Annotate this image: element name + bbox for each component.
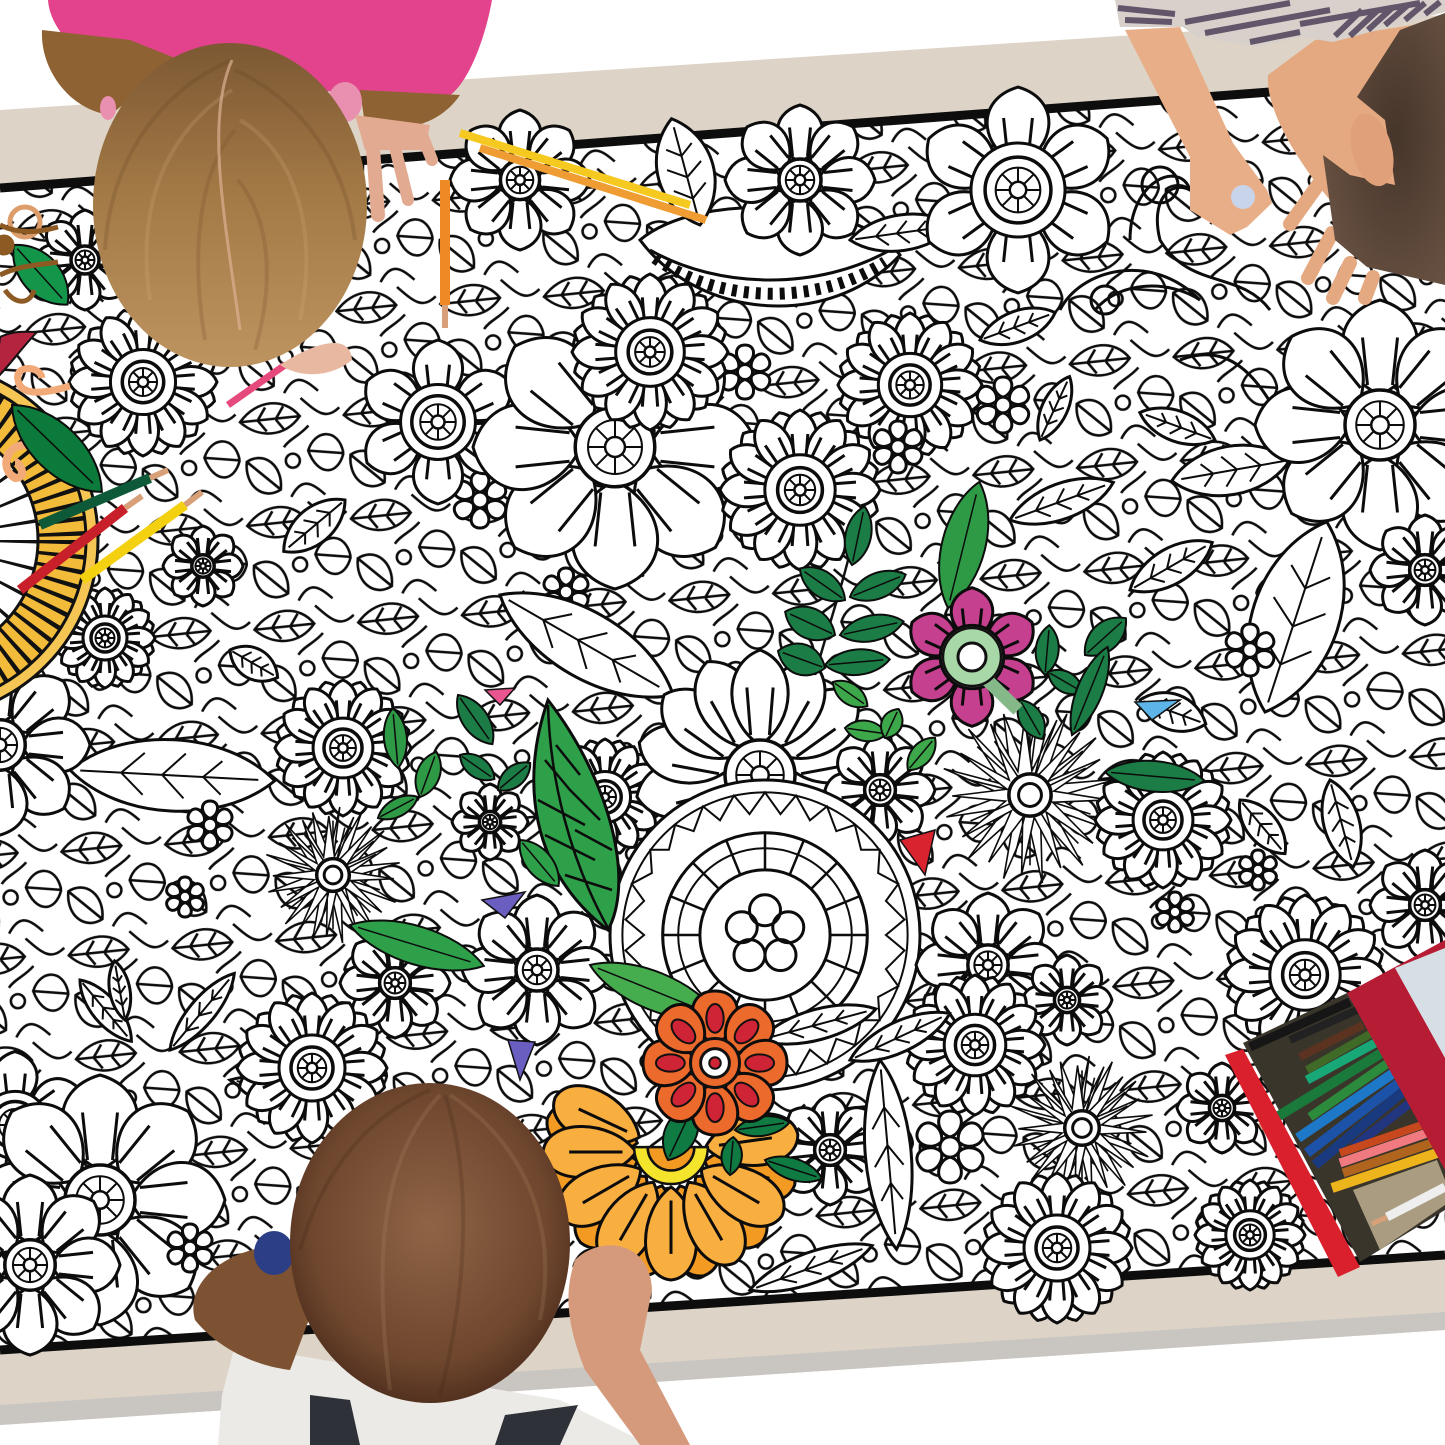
small flower (1155, 892, 1195, 932)
big green striped leaf (534, 700, 619, 930)
dark red petal (0, 332, 37, 380)
right hand fingers (355, 115, 432, 215)
flower (904, 974, 1046, 1116)
hand lower (280, 343, 352, 374)
flower (825, 735, 935, 845)
light green leaves (827, 674, 943, 777)
leaf (844, 1000, 956, 1074)
right ponytail (360, 90, 460, 129)
flower (67, 306, 219, 458)
flower (1177, 1063, 1267, 1153)
flower (340, 928, 450, 1038)
face (1268, 20, 1445, 200)
flower left edge (0, 655, 90, 835)
small flower (974, 377, 1032, 433)
leaf (756, 994, 880, 1055)
flower (450, 110, 590, 250)
leaf (1121, 527, 1221, 605)
poster top rail (0, 80, 1445, 188)
small flower (541, 568, 591, 616)
arm and hand (1125, 27, 1272, 235)
big half daisy (632, 650, 888, 824)
red flower (643, 991, 787, 1135)
flower (980, 1171, 1134, 1325)
daisy centre (634, 1147, 708, 1184)
leaf (160, 965, 244, 1058)
pencils in box (1250, 1002, 1445, 1224)
large flower (0, 1075, 225, 1325)
flower (570, 272, 730, 432)
flower (452, 784, 528, 860)
flower (913, 1111, 987, 1183)
leaf (105, 959, 135, 1022)
big leaf at top (644, 111, 727, 232)
leaf (222, 637, 285, 691)
child bottom (193, 1083, 690, 1445)
flower (54, 587, 156, 689)
central mandala (610, 780, 920, 1090)
pencils on poster (20, 133, 706, 590)
flower (725, 105, 875, 255)
leaf (272, 486, 356, 565)
flower (1022, 955, 1112, 1045)
leaf (483, 566, 690, 724)
leaves around pink flower (1010, 608, 1206, 796)
hair streaks (105, 60, 355, 350)
flower (0, 1052, 90, 1198)
flower (1370, 850, 1445, 960)
ponytail (193, 1245, 320, 1370)
pink shirt (48, 0, 492, 100)
head hair (290, 1083, 570, 1403)
top arc ornament (640, 111, 956, 306)
hair band pink (328, 82, 362, 122)
small flower (717, 345, 773, 399)
daisy leaves (654, 1099, 825, 1189)
flower (462, 895, 612, 1045)
leaf (1134, 683, 1212, 741)
leaf (1168, 436, 1294, 505)
flower (837, 312, 983, 458)
leaf (1135, 398, 1220, 454)
large daisy (473, 305, 757, 589)
coloured sprig and pink flower (773, 477, 1206, 796)
box interior (1243, 993, 1445, 1262)
shirt (218, 1345, 650, 1445)
fingers (1290, 182, 1373, 298)
ear (1343, 109, 1401, 191)
flower (775, 1095, 885, 1205)
spiky flower (1005, 1050, 1159, 1206)
small coloured buds (482, 688, 1180, 1080)
flower (0, 1175, 120, 1355)
leaf (1228, 790, 1297, 863)
hair band left (100, 96, 116, 120)
box floor (1353, 1160, 1445, 1250)
leaf (1028, 371, 1081, 445)
leaf (975, 298, 1060, 354)
small flower (451, 472, 509, 528)
small flower (871, 421, 925, 473)
head hair (93, 43, 367, 367)
leaf (68, 734, 277, 816)
flower (546, 738, 664, 856)
flower (163, 526, 243, 606)
poster bottom rail (0, 1255, 1445, 1350)
small flower (1370, 515, 1445, 625)
small flower (1238, 850, 1278, 890)
lid inner panel (1395, 948, 1445, 1058)
leaf (848, 208, 956, 258)
orange daisy (541, 1075, 801, 1282)
back petals (541, 1094, 801, 1282)
flower (235, 991, 389, 1145)
hair streaks (300, 1090, 545, 1395)
leaf (228, 1067, 365, 1116)
leaf (745, 1231, 877, 1304)
parting (219, 60, 240, 330)
table front edge (0, 1312, 1445, 1425)
striped shirt (1115, 0, 1445, 47)
leaf (70, 972, 141, 1049)
shirt stripes (1118, 2, 1440, 42)
small flower (165, 877, 205, 917)
green leaf left of flower (344, 907, 489, 984)
leaf (1004, 466, 1119, 537)
spiky flower (260, 801, 406, 949)
pink flower (902, 588, 1042, 726)
flower (1094, 751, 1232, 889)
vines upper right (1060, 167, 1280, 420)
marker (1231, 185, 1255, 209)
leaf (857, 1058, 919, 1251)
flower (1223, 893, 1387, 1057)
small flower (1223, 624, 1277, 676)
hair (1323, 13, 1445, 285)
green leaf right of flower (583, 947, 727, 1035)
pencil box (1225, 940, 1445, 1277)
pink flower centre (943, 628, 1018, 710)
flower (165, 1224, 215, 1272)
arm (568, 1245, 690, 1445)
large right flower (1255, 300, 1445, 550)
coloured mandala at left edge (0, 332, 118, 718)
child top left (42, 0, 492, 374)
left ponytail (42, 30, 180, 115)
box lid (1347, 940, 1445, 1170)
leaf (1313, 775, 1371, 872)
green leaf (0, 388, 118, 508)
flower (274, 679, 412, 817)
flower (913, 87, 1123, 293)
coloured small leaves (374, 688, 537, 826)
leaf (1224, 508, 1368, 725)
flower (35, 210, 135, 310)
peach swirls (18, 368, 70, 392)
flower (1194, 1179, 1306, 1291)
front petals (543, 1075, 801, 1280)
child top right (1115, 0, 1445, 298)
sprig leaves (773, 504, 910, 682)
scrunchie (254, 1231, 294, 1275)
overall straps (310, 1395, 578, 1445)
flower (916, 893, 1060, 1037)
box red front rim (1225, 1049, 1360, 1277)
coloured corner sprig (0, 207, 82, 317)
flower (355, 340, 521, 504)
green leaf near stem (510, 832, 568, 894)
small flower (185, 801, 235, 849)
flower (718, 408, 882, 572)
sprig stem (815, 510, 860, 675)
leaf (927, 477, 1000, 613)
spiky flower (936, 699, 1124, 891)
